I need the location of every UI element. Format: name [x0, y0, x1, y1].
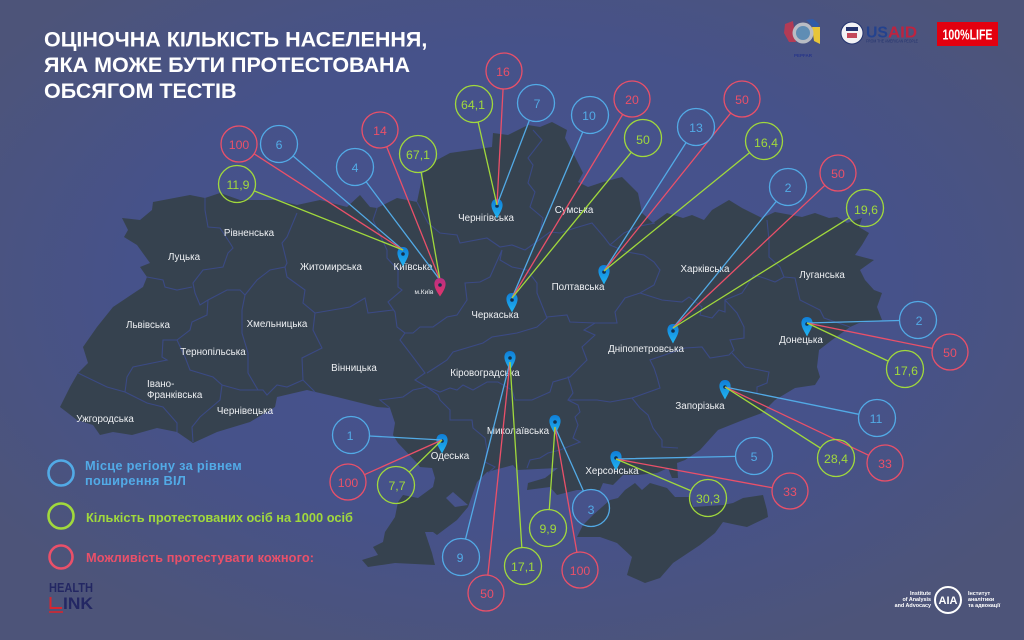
value: протестовано 7,7: 7,7 — [388, 479, 406, 493]
value: протестовано 11,9: 11,9 — [226, 178, 250, 192]
region labels: Харківська — [681, 264, 730, 275]
value: рівень 3 — [572, 490, 610, 526]
title: ОБСЯГОМ ТЕСТІВ — [44, 79, 236, 103]
region labels — [76, 205, 845, 477]
value: рівень 3: 3 — [588, 503, 595, 517]
pin: Полтавська — [598, 265, 610, 284]
value: рівень 7: 7 — [534, 97, 541, 111]
value: протестовано 64,1 — [456, 86, 492, 122]
region labels: Київська — [394, 262, 433, 273]
value: можливість 100: 100 — [229, 138, 249, 152]
legend item: місце регіону — [48, 458, 242, 488]
value: протестовано 16,4 — [746, 122, 782, 160]
value: можливість 33: 33 — [878, 457, 892, 471]
value: можливість 50: 50 — [735, 93, 749, 107]
value: можливість 50 — [724, 81, 760, 117]
logo: PEPFAR: PEPFAR — [794, 53, 813, 58]
value: рівень 5: 5 — [751, 450, 758, 464]
value: рівень 10 — [572, 96, 608, 134]
value: можливість 20: 20 — [625, 93, 639, 107]
region labels: Житомирська — [300, 262, 363, 273]
legend item: місце регіону: поширення ВІЛ — [85, 473, 186, 488]
value: можливість 100: 100 — [338, 476, 358, 490]
logo: USAID — [841, 22, 918, 44]
logo: Institute of Analysis and Advocacy: Institute — [910, 591, 931, 597]
value: рівень 7 — [518, 84, 554, 122]
value: можливість 50 — [932, 334, 968, 370]
value: протестовано 67,1 — [400, 136, 436, 172]
callouts: Одеська — [330, 416, 448, 504]
value: рівень 13 — [678, 108, 714, 146]
legend item: кількість протестованих — [48, 504, 353, 528]
value: рівень 2 — [770, 168, 806, 206]
value: рівень 11: 11 — [870, 412, 883, 426]
value: протестовано 50 — [624, 120, 662, 156]
value: протестовано 9,9: 9,9 — [539, 522, 557, 536]
region labels: Одеська — [431, 451, 470, 462]
logo: Institute of Analysis and Advocacy: Інститут — [968, 591, 991, 597]
title — [44, 28, 427, 103]
region labels: м.Київ — [415, 289, 434, 296]
value: рівень 10: 10 — [582, 109, 596, 123]
pin: Миколаївська — [549, 415, 561, 434]
pin: м.Київ — [434, 278, 446, 296]
value: протестовано 19,6 — [846, 190, 884, 226]
value: можливість 20 — [614, 81, 650, 117]
region labels: Львівська — [126, 320, 171, 331]
logo: Institute of Analysis and Advocacy: AIA — [939, 595, 958, 607]
value: рівень 6 — [260, 126, 298, 162]
value: рівень 4 — [336, 148, 374, 186]
value: протестовано 67,1: 67,1 — [406, 148, 430, 162]
value: можливість 100 — [221, 126, 257, 162]
value: рівень 1: 1 — [347, 429, 354, 443]
title: ЯКА МОЖЕ БУТИ ПРОТЕСТОВАНА — [44, 53, 410, 77]
logo: USAID: US — [866, 24, 888, 42]
value: протестовано 19,6: 19,6 — [854, 203, 878, 217]
region labels: Луганська — [799, 270, 845, 281]
region labels: Миколаївська — [487, 426, 550, 437]
value: рівень 9: 9 — [457, 551, 464, 565]
legend item: можливість протестувати — [50, 546, 314, 568]
value: протестовано 50: 50 — [636, 133, 650, 147]
logo: USAID: FROM THE AMERICAN PEOPLE — [866, 38, 918, 44]
value: можливість 16: 16 — [496, 65, 510, 79]
logo: Institute of Analysis and Advocacy — [895, 587, 1001, 613]
logo: Institute of Analysis and Advocacy: of Analysis — [902, 597, 931, 603]
pin: Дніпропетровська — [667, 324, 679, 344]
value: можливість 14 — [362, 112, 398, 148]
region labels: Тернопільська — [180, 347, 246, 358]
logo: 100%LIFE — [937, 22, 998, 46]
value: можливість 33 — [867, 445, 903, 481]
callouts: Дніпропетровська — [667, 155, 884, 344]
region labels: Івано- — [147, 379, 174, 390]
value: протестовано 16,4: 16,4 — [754, 136, 778, 150]
callouts: Миколаївська — [530, 415, 610, 588]
value: можливість 33 — [772, 473, 808, 509]
value: можливість 50: 50 — [480, 587, 494, 601]
title: ОЦІНОЧНА КІЛЬКІСТЬ НАСЕЛЕННЯ, — [44, 28, 427, 52]
logo: USAID: AID — [888, 24, 917, 42]
legend item: кількість протестованих: Кількість протестованих осіб на 1000 осіб — [86, 510, 353, 525]
value: можливість 50: 50 — [831, 167, 845, 181]
region labels: Дніпопетровська — [608, 344, 684, 355]
value: рівень 4: 4 — [352, 161, 359, 175]
value: протестовано 17,6: 17,6 — [894, 364, 918, 378]
logo: 100%LIFE: 100%LIFE — [942, 26, 992, 44]
value: протестовано 17,6 — [886, 350, 924, 388]
value: можливість 16 — [486, 53, 522, 89]
pin: Одеська — [436, 434, 448, 454]
value: можливість 100: 100 — [570, 564, 590, 578]
logo: PEPFAR — [784, 19, 820, 58]
callouts: Черкаська — [506, 81, 662, 312]
callouts: Полтавська — [598, 81, 782, 284]
value: можливість 50: 50 — [943, 346, 957, 360]
pin: Херсонська — [610, 451, 622, 470]
region labels: Вінницька — [331, 363, 377, 374]
value: протестовано 30,3 — [690, 480, 726, 516]
logo: Institute of Analysis and Advocacy: and Advocacy — [895, 603, 931, 609]
logo: Health Link: INK — [63, 594, 94, 613]
pin: Кіровоградська — [504, 351, 516, 370]
callouts: Херсонська — [610, 438, 808, 516]
pin: Київська — [397, 247, 409, 266]
value: рівень 13: 13 — [689, 121, 703, 135]
region labels: Чернігівська — [458, 213, 514, 224]
value: рівень 9 — [442, 538, 480, 576]
value: протестовано 28,4 — [818, 440, 854, 476]
callouts: Кіровоградська — [442, 351, 542, 611]
value: протестовано 17,1: 17,1 — [511, 560, 535, 574]
region labels: Хмельницька — [247, 319, 308, 330]
value: рівень 2: 2 — [916, 314, 923, 328]
region labels: Херсонська — [585, 466, 639, 477]
region labels: Чернівецька — [217, 406, 274, 417]
callouts: Запорізька — [719, 380, 903, 481]
logo: Health Link: HEALTH — [49, 581, 93, 595]
value: можливість 14: 14 — [373, 124, 387, 138]
callouts: м.Київ — [336, 112, 446, 296]
pin: Запорізька — [719, 380, 731, 400]
map of Ukraine — [60, 122, 882, 583]
logo: Health Link — [49, 581, 94, 613]
value: рівень 5 — [736, 438, 772, 474]
value: рівень 2: 2 — [785, 181, 792, 195]
value: протестовано 9,9 — [530, 510, 566, 546]
pin: Донецька — [801, 317, 813, 336]
value: протестовано 28,4: 28,4 — [824, 452, 848, 466]
value: можливість 33: 33 — [783, 485, 797, 499]
value: протестовано 64,1: 64,1 — [461, 98, 485, 112]
region labels: Луцька — [168, 252, 201, 263]
value: можливість 50 — [820, 155, 856, 191]
callouts: Чернігівська — [456, 53, 554, 218]
value: можливість 50 — [468, 575, 504, 611]
callouts: Донецька — [801, 302, 968, 388]
pin: Чернігівська — [491, 199, 503, 218]
value: можливість 100 — [562, 552, 598, 588]
Crimea — [577, 483, 768, 583]
value: рівень 2 — [900, 302, 936, 338]
value: рівень 6: 6 — [276, 138, 283, 152]
region labels: Франківська — [147, 390, 203, 401]
callouts: Київська — [218, 126, 409, 266]
value: рівень 11 — [858, 400, 896, 436]
value: протестовано 17,1 — [504, 548, 542, 584]
value: протестовано 30,3: 30,3 — [696, 492, 720, 506]
region labels: Полтавська — [552, 282, 605, 293]
legend item: можливість протестувати: Можливість протестувати кожного: — [86, 550, 314, 565]
legend item: місце регіону: Місце регіону за рівнем — [85, 458, 242, 473]
region labels: Кіровоградська — [450, 368, 520, 379]
region labels: Черкаська — [471, 310, 519, 321]
region labels: Донецька — [779, 335, 823, 346]
logo: Institute of Analysis and Advocacy: аналітики — [968, 597, 994, 603]
value: протестовано 11,9 — [218, 166, 256, 202]
pin: Черкаська — [506, 293, 518, 312]
region labels: Рівненська — [224, 228, 275, 239]
region labels: Ужгородська — [76, 414, 134, 425]
legend — [48, 458, 353, 568]
region labels: Сумська — [555, 205, 594, 216]
logo: Institute of Analysis and Advocacy: та адвокації — [968, 603, 1001, 609]
region labels: Запорізька — [675, 401, 725, 412]
